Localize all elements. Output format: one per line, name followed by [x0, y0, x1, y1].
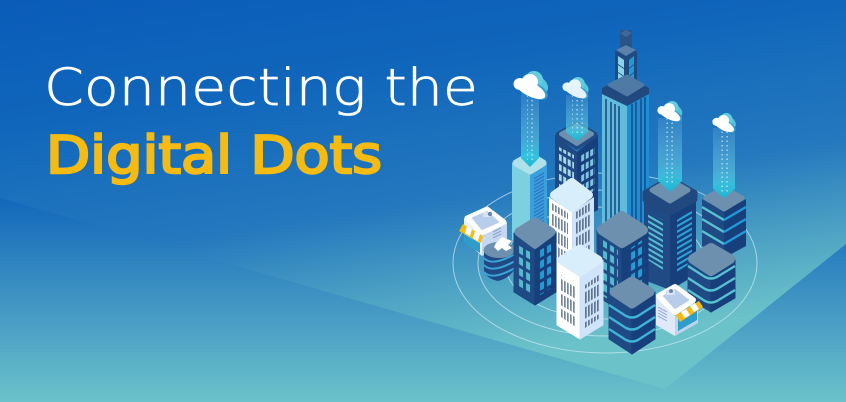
building: white front tower [557, 249, 603, 339]
cloud 4 [711, 112, 738, 135]
cloud 3 [656, 100, 685, 124]
building: dark with pale windows [555, 125, 598, 220]
building: light teal [512, 155, 547, 250]
skyscraper [602, 30, 649, 250]
building: slatted dark tower [644, 177, 696, 290]
beam 3 [658, 118, 682, 192]
data beams [521, 92, 735, 198]
building: dark with windows, center [597, 216, 648, 312]
beam 4 [713, 128, 735, 198]
building: banded, right [688, 248, 735, 312]
isometric city illustration [453, 30, 757, 354]
building: white rear tower [549, 182, 594, 272]
building: banded, front [609, 281, 655, 354]
title [44, 59, 478, 186]
shop: right [656, 287, 703, 336]
cloud 2 [561, 76, 591, 102]
building: cyan banded tower [702, 188, 746, 258]
building: dark with windows, left [514, 222, 556, 305]
title line: Digital Dots: Digital Dots [46, 126, 382, 186]
title line: Connecting the: Connecting the [44, 59, 478, 118]
clouds [512, 69, 738, 135]
beam 2 [566, 95, 588, 141]
beam 1 [521, 92, 539, 167]
storage cylinder [484, 237, 515, 281]
shop: left [459, 209, 507, 256]
orbit rings [453, 173, 757, 353]
cloud 1 [512, 69, 552, 104]
